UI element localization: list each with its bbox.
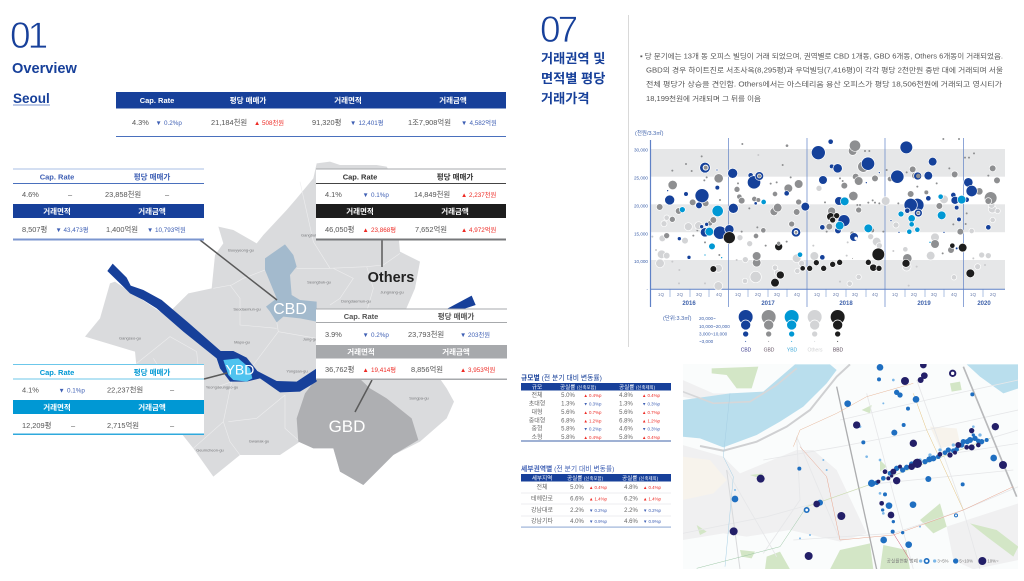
table: vacancy by size: 1.2%p	[589, 418, 602, 424]
table: YBD: Cap. Rate	[40, 368, 74, 377]
table: GBD: 203천원	[468, 330, 490, 339]
map district labels: Yeongdeungpo-gu	[206, 384, 238, 390]
table: GBD: ▲	[460, 367, 466, 374]
map district labels: Jungnang-gu	[380, 290, 404, 294]
map: legend: 공실률현황 범례	[887, 557, 918, 564]
table: vacancy by size: 0.4%p	[589, 393, 602, 398]
chart: y axis labels: 25,000	[634, 176, 648, 180]
map district labels: Gwanak-gu	[249, 438, 269, 444]
table: Others: ▲	[362, 227, 369, 234]
table: CBD: 거래금액	[138, 206, 166, 216]
table: CBD: 10,793억원	[155, 225, 186, 234]
table: GBD: 3.9%	[325, 330, 342, 339]
table: vacancy by sub-area: ▲	[589, 485, 593, 490]
table: vacancy by size: 6.8%	[561, 418, 575, 424]
chart: quarter labels: 4Q	[872, 292, 878, 297]
table: vacancy by size: ▲	[584, 410, 588, 415]
table: Seoul summary: ▼	[350, 120, 356, 127]
table: vacancy by sub-area: ▲	[643, 485, 647, 490]
table: vacancy by size: 5.8%	[561, 435, 575, 441]
chart: quarter labels: 3Q	[852, 292, 858, 297]
table: CBD: –	[68, 190, 73, 199]
table: vacancy by sub-area: 전체	[536, 483, 548, 491]
table: Seoul summary: 거래면적	[334, 95, 362, 105]
map district labels: Buuyyeong-gu	[228, 248, 254, 252]
chart: y axis labels: 15,000	[634, 232, 648, 236]
map: GBD area	[297, 378, 418, 485]
heading: Overview: Overview	[12, 61, 78, 77]
table: vacancy by size: ▼	[642, 402, 646, 406]
map: legend: 5~10%	[959, 559, 973, 564]
label: Others: Others	[368, 270, 414, 286]
table: vacancy by sub-area: ▼	[643, 519, 647, 524]
leader line: CBD	[200, 240, 277, 300]
table: Others: ▼	[362, 192, 369, 199]
chart: quarter labels: 4Q	[716, 292, 722, 297]
table: vacancy by size: 대형	[531, 408, 543, 416]
table: vacancy by sub-area: 2.2%	[570, 508, 584, 514]
table: Seoul summary: Cap. Rate	[140, 96, 174, 105]
chart: quarter labels: 1Q	[658, 292, 664, 297]
leader line: Others	[381, 240, 383, 267]
chart: y axis labels: -	[646, 287, 648, 292]
chart: legend: (단위:3.3㎡)	[663, 314, 692, 322]
section number 07: 07	[540, 9, 577, 50]
table: vacancy by sub-area: 강남기타	[531, 517, 554, 525]
map: Han river	[107, 264, 317, 392]
table: vacancy by size: ▲	[642, 435, 646, 440]
table: vacancy by size: 4.8%	[619, 393, 633, 399]
table: vacancy by size: 6.8%	[619, 418, 633, 424]
chart: y axis labels: (천원/3.3㎡)	[635, 129, 664, 137]
chart: y axis labels: 30,000	[634, 148, 648, 152]
table: vacancy by size: ▲	[584, 418, 588, 424]
table: vacancy by sub-area: 0.4%p	[594, 485, 608, 490]
table: YBD: 거래면적	[43, 402, 71, 412]
table: vacancy by sub-area: 4.8%	[624, 485, 638, 491]
table: vacancy by size: 규모별 (전 분기 대비 변동률)	[521, 373, 602, 382]
table: vacancy by sub-area: 0.9%p	[594, 519, 608, 524]
chart: quarter labels: 4Q	[794, 292, 800, 297]
table: CBD: ▼	[56, 227, 62, 234]
chart: quarter labels: 1Q	[970, 292, 976, 297]
table: vacancy by size: ▼	[584, 426, 588, 432]
table: Others: ▲	[461, 192, 467, 199]
map: legend: 10%~	[987, 559, 999, 564]
map: river	[683, 364, 837, 447]
table: vacancy by size: 0.3%p	[648, 426, 661, 432]
table: vacancy by size: 0.4%p	[648, 435, 661, 440]
table: YBD: –	[170, 386, 175, 394]
table: Seoul summary: 12,401평	[358, 118, 384, 127]
table: GBD: 8,856억원	[411, 365, 443, 374]
table: vacancy by size: ▲	[584, 435, 588, 440]
chart: legend: BBD	[833, 348, 844, 354]
chart: quarter labels: 3Q	[696, 292, 702, 297]
table: vacancy by sub-area: ▼	[643, 508, 647, 513]
table: CBD: 평당 매매가	[134, 172, 170, 182]
chart: axes and year separators	[650, 138, 1005, 307]
chart: legend	[663, 310, 845, 354]
table: Others: 0.1%p	[371, 192, 389, 199]
table: vacancy by size: 0.2%p	[589, 426, 602, 432]
table: vacancy by sub-area: 공실률 (신축포함)	[567, 474, 604, 482]
chart: legend: 3,000~10,000	[699, 332, 728, 336]
table: vacancy by sub-area: 세부권역별 (전 분기 대비 변동률)	[521, 464, 614, 473]
table: Others: ▲	[461, 227, 467, 234]
map: Gangnam vacancy locations	[680, 360, 1021, 573]
leader line: YBD	[204, 373, 227, 379]
table: vacancy by size: ▼	[642, 426, 646, 432]
table: Others: 거래금액	[441, 206, 469, 216]
table: vacancy by size: 1.2%p	[648, 418, 661, 424]
table: Seoul summary: ▲	[254, 120, 260, 127]
label: CBD: CBD	[273, 301, 307, 318]
map district labels	[119, 232, 429, 452]
table: Seoul summary: 0.2%p	[164, 120, 182, 127]
heading: transaction area and price: 거래권역 및	[541, 51, 605, 66]
map: green parks	[697, 367, 1018, 569]
chart: quarter labels: 1Q	[735, 292, 741, 297]
table: vacancy by size: 0.3%p	[648, 402, 661, 406]
table: vacancy by size: ▼	[584, 402, 588, 406]
table: vacancy by sub-area: 0.4%p	[648, 485, 662, 490]
heading: Seoul: Seoul	[13, 91, 50, 106]
table: GBD: 거래면적	[347, 346, 375, 356]
map district labels: Jung-gu	[303, 336, 317, 342]
table: CBD: ▼	[147, 227, 153, 234]
table: vacancy by sub-area: ▲	[589, 496, 593, 502]
table: vacancy by sub-area: 강남대로	[531, 506, 554, 514]
table: Seoul summary: 4,582억원	[470, 118, 497, 127]
table: CBD: 4.6%	[22, 190, 39, 199]
text block: market commentary: 전체 평당가 상승을 견인함. Others에서는 아스테리움 용산 오피스가 평당 18,506천원에 거래되고 영시티가	[646, 80, 1003, 88]
table: vacancy by sub-area: 1.4%p	[648, 496, 662, 502]
chart: bubbles	[651, 138, 1000, 290]
table: vacancy by size: 0.4%p	[648, 393, 661, 398]
heading: transaction area and price	[541, 51, 605, 106]
chart: quarter labels: 2Q	[833, 292, 839, 297]
chart: year labels: 2018	[839, 301, 853, 307]
map: subway lines	[697, 383, 1013, 568]
map district labels: Gangbuk-gu	[301, 232, 323, 238]
table: YBD: 4.1%	[22, 386, 39, 394]
table: vacancy by size: 5.6%	[619, 410, 633, 416]
chart: quarter labels	[658, 292, 996, 297]
chart: quarter labels: 2Q	[911, 292, 917, 297]
table: Others: 14,849천원	[414, 190, 450, 199]
table: Seoul summary	[116, 92, 506, 136]
chart: legend: CBD	[741, 348, 752, 354]
table: CBD	[13, 169, 204, 240]
text block: market commentary: ▪ 당 분기에는 13개 동 오피스 빌딩이 거래 되었으며, 권역별로 CBD 1개동, GBD 6개동, Others 6개동이 거래되었음.	[640, 52, 1003, 60]
table: vacancy by sub-area: 4.6%	[624, 519, 638, 525]
table: GBD: 36,762평	[325, 365, 354, 374]
map: YBD area	[223, 358, 252, 382]
table: vacancy by sub-area: 세부지역	[532, 474, 552, 482]
table: YBD: –	[170, 421, 175, 430]
table: Seoul summary: 91,320평	[312, 118, 341, 127]
map district labels: Seongbuk-gu	[307, 280, 331, 284]
table: Others: 거래면적	[346, 206, 374, 216]
map district labels: Geumcheon-gu	[196, 448, 224, 452]
table: GBD: 0.2%p	[371, 332, 389, 339]
map district labels: Dongdaemun-gu	[341, 298, 371, 304]
table: YBD: 22,237천원	[107, 386, 143, 394]
table: vacancy by size: ▲	[584, 393, 588, 398]
map: legend: 3~5%	[937, 559, 949, 564]
table: CBD: Cap. Rate	[40, 172, 74, 182]
table: vacancy by sub-area: 4.0%	[570, 519, 584, 525]
table: Others	[316, 169, 506, 240]
map district labels: Yongsan-gu	[286, 368, 308, 374]
table: GBD: Cap. Rate	[344, 312, 378, 321]
table: CBD: 23,858천원	[105, 190, 141, 199]
table: vacancy by size: 중대형	[529, 416, 545, 424]
table: CBD: 8,507평	[22, 225, 47, 234]
chart: quarter labels: 3Q	[774, 292, 780, 297]
map: CBD area	[265, 244, 317, 322]
map: base districts	[85, 162, 454, 485]
table: vacancy by size: 전체	[531, 391, 543, 399]
table: CBD: 1,400억원	[106, 225, 138, 234]
map: district boundaries	[137, 182, 400, 455]
table: Seoul summary: 4.3%	[132, 118, 149, 127]
table: GBD: 19,414평	[371, 365, 396, 374]
table: vacancy by size: 규모	[532, 384, 542, 391]
table: vacancy by size: 5.6%	[561, 410, 575, 416]
table: vacancy by sub-area: 공실률 (신축제외)	[622, 474, 659, 482]
table: Others: 평당 매매가	[437, 172, 473, 182]
bubble chart	[634, 129, 1005, 354]
table: YBD: 2,715억원	[107, 421, 139, 430]
table: vacancy by size: 1.3%	[619, 402, 633, 408]
table: vacancy by size: ▲	[642, 393, 646, 398]
leader line: GBD	[355, 380, 372, 412]
table: vacancy by sub-area: 0.2%p	[648, 508, 662, 513]
table: vacancy by size: 1.3%	[561, 402, 575, 408]
table: Seoul summary: ▼	[156, 120, 162, 127]
map: main dark roads	[837, 387, 877, 569]
table: Seoul summary: ▼	[461, 120, 467, 127]
table: vacancy by size: 0.3%p	[589, 402, 602, 406]
table: YBD: 거래금액	[138, 402, 166, 412]
chart: quarter labels: 2Q	[677, 292, 683, 297]
map: vacancy dots	[730, 362, 1007, 560]
table: CBD: 거래면적	[43, 206, 71, 216]
table: Others: 23,868평	[371, 225, 396, 234]
table: vacancy by size: 공실률 (신축포함)	[560, 383, 597, 391]
table: vacancy by size: 초대형	[529, 400, 545, 408]
heading: transaction area and price: 거래가격	[541, 91, 590, 106]
chart: quarter labels: 4Q	[951, 292, 957, 297]
chart: quarter labels: 3Q	[931, 292, 937, 297]
table: vacancy by sub-area: 테헤란로	[531, 494, 554, 502]
map district labels: Gangseo-gu	[119, 336, 141, 340]
chart: year labels	[682, 301, 991, 307]
table: GBD: 23,793천원	[408, 330, 444, 339]
chart: legend: 20,000~	[699, 316, 716, 321]
table: Others: 2,237천원	[469, 190, 497, 199]
table: YBD: –	[71, 421, 76, 430]
map: legend	[887, 557, 999, 565]
table: GBD: 거래금액	[442, 346, 470, 356]
table: GBD	[316, 309, 507, 380]
table: Others: 4.1%	[325, 190, 342, 199]
text block: market commentary	[640, 52, 1004, 103]
map: road network	[683, 380, 1018, 569]
table: GBD: ▼	[460, 332, 466, 339]
table: vacancy by sub-area: 6.6%	[570, 496, 584, 502]
map district labels: Mapo-gu	[234, 340, 250, 344]
table: GBD: ▼	[362, 332, 369, 339]
chart: legend: GBD	[764, 348, 775, 354]
chart: y axis labels: 10,000	[634, 259, 648, 264]
label: GBD: GBD	[329, 417, 365, 436]
table: Seoul summary: 508천원	[262, 118, 284, 127]
chart: legend: Others	[807, 348, 823, 354]
table: GBD: 3,953억원	[468, 365, 496, 374]
table: vacancy by size: 4.6%	[619, 426, 633, 432]
table: vacancy by sub-area: 0.9%p	[648, 519, 662, 524]
table: vacancy by size: 0.4%p	[589, 435, 602, 440]
table: Seoul summary: 거래금액	[439, 95, 467, 105]
table: vacancy by sub-area: ▼	[589, 519, 593, 524]
table: Others: 7,652억원	[415, 225, 447, 234]
table: YBD: 0.1%p	[67, 388, 85, 394]
table: Seoul summary: 21,184천원	[211, 118, 247, 127]
map district labels: Songpa-gu	[409, 396, 429, 400]
chart: shaded bands	[651, 149, 1005, 289]
table: GBD: 평당 매매가	[438, 311, 474, 321]
map of Seoul	[85, 162, 476, 485]
table: vacancy by size: 0.7%p	[648, 410, 661, 415]
heading: transaction area and price: 면적별 평당	[541, 71, 605, 86]
table: vacancy by size: 소형	[531, 433, 543, 441]
table: vacancy by sub-area: 6.2%	[624, 496, 638, 502]
table: Others: Cap. Rate	[343, 172, 377, 182]
chart: year labels: 2020	[977, 301, 991, 307]
table: vacancy by sub-area	[521, 464, 671, 528]
table: vacancy by size: ▲	[642, 410, 646, 415]
table: vacancy by size: ▲	[642, 418, 646, 424]
chart: quarter labels: 1Q	[892, 292, 898, 297]
table: YBD	[13, 364, 204, 435]
chart: y axis labels: 20,000	[634, 204, 648, 208]
chart: year labels: 2016	[682, 301, 696, 307]
map: built-up blocks	[683, 380, 1018, 569]
table: CBD: 43,473평	[64, 225, 89, 234]
map: riverside expressway	[700, 364, 850, 451]
chart: legend: 10,000~20,000	[699, 324, 730, 329]
table: vacancy by sub-area: ▼	[589, 508, 593, 513]
map district labels: Seodaemun-gu	[233, 306, 261, 312]
table: vacancy by size: 0.7%p	[589, 410, 602, 415]
chart: year labels: 2019	[917, 301, 931, 307]
table: Others: 46,050평	[325, 225, 354, 234]
table: YBD: ▼	[58, 388, 65, 394]
table: vacancy by size: 중형	[531, 424, 543, 432]
table: Seoul summary: 평당 매매가	[230, 95, 266, 105]
table: GBD: ▲	[362, 367, 369, 374]
table: vacancy by sub-area: 2.2%	[624, 508, 638, 514]
section number 01: 01	[10, 15, 47, 56]
chart: quarter labels: 1Q	[814, 292, 820, 297]
chart: quarter labels: 2Q	[990, 292, 996, 297]
table: vacancy by size	[521, 373, 671, 442]
chart: quarter labels: 2Q	[755, 292, 761, 297]
table: Others: 4,972억원	[469, 225, 497, 234]
table: vacancy by size: 5.0%	[561, 393, 575, 399]
table: vacancy by size: 5.8%	[619, 435, 633, 441]
table: vacancy by size: 공실률 (신축제외)	[619, 383, 656, 391]
text block: market commentary: 18,199천원에 거래되며 그 뒤를 이음	[646, 94, 762, 103]
label: YBD: YBD	[226, 362, 254, 378]
table: vacancy by sub-area: 5.0%	[570, 485, 584, 491]
table: CBD: –	[165, 190, 170, 199]
table: YBD: 12,209평	[22, 421, 51, 430]
chart: year labels: 2017	[761, 301, 775, 307]
chart: y axis labels	[634, 129, 664, 292]
chart: legend: ~3,000	[699, 339, 714, 344]
table: vacancy by size: 5.8%	[561, 426, 575, 432]
table: vacancy by sub-area: 1.4%p	[594, 496, 608, 502]
text block: market commentary: GBD의 경우 하이트진로 서초사옥(8,295평)과 우덕빌딩(7,416평)이 각각 평당 2천만원 중반 대에 거래되며 서울	[646, 66, 1004, 74]
vertical divider	[628, 15, 630, 347]
table: vacancy by sub-area: ▲	[643, 496, 647, 502]
table: Seoul summary: 1조7,908억원	[408, 118, 451, 127]
map: Han river east	[447, 296, 476, 310]
table: YBD: 평당 매매가	[134, 367, 170, 377]
table: vacancy by sub-area: 0.2%p	[594, 508, 608, 513]
chart: legend: YBD	[787, 348, 798, 354]
